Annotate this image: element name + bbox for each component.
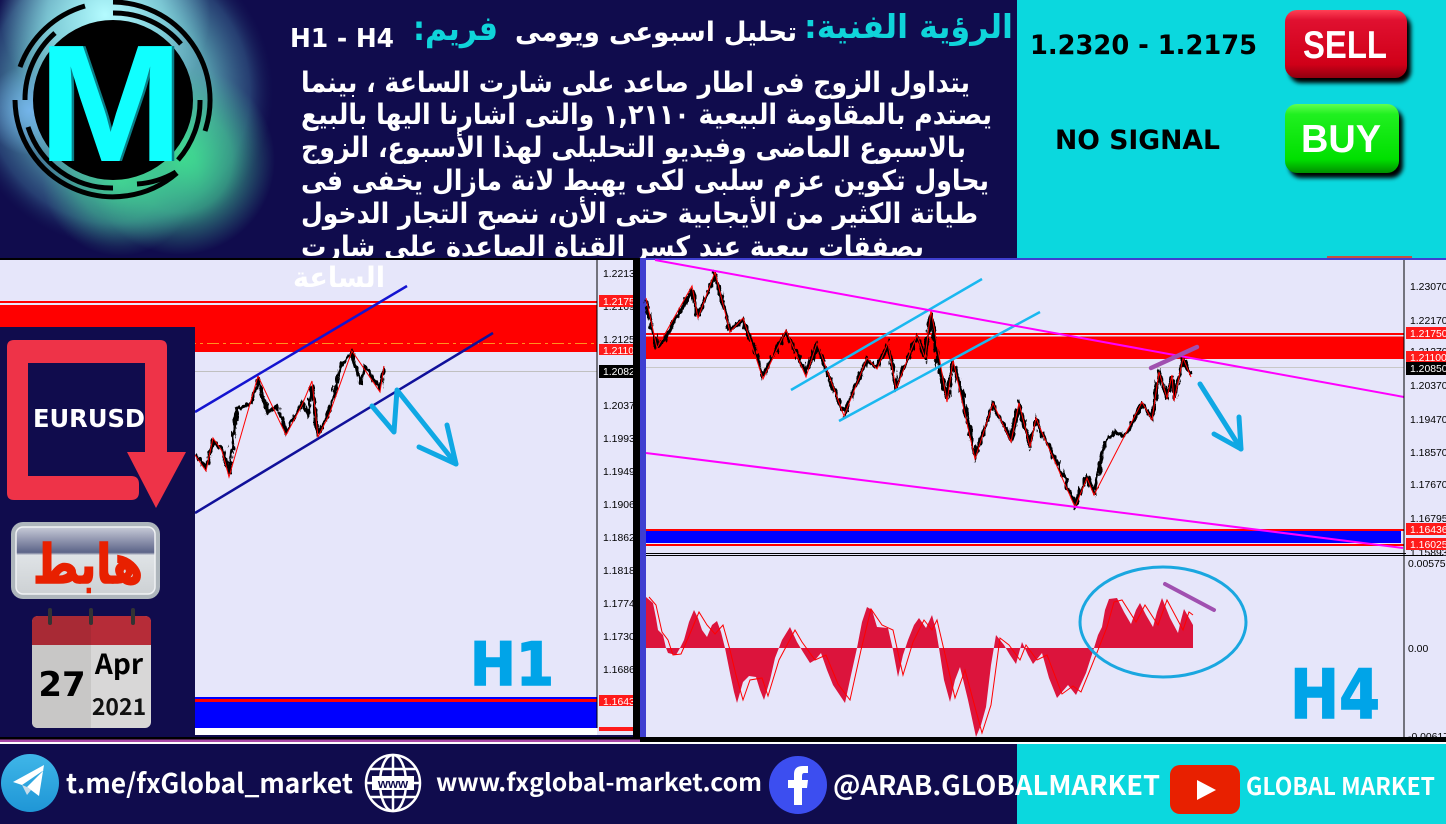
axis: H1 prices: 1.16436 <box>603 697 641 708</box>
arrow: H4 forecast <box>1200 384 1241 449</box>
channel cyan upper <box>791 279 982 390</box>
icon: youtube <box>1170 765 1240 814</box>
button: falling label: هابط <box>33 533 143 596</box>
chart: H4 price chart <box>640 258 1446 743</box>
icon: date calendar: Apr <box>94 643 144 683</box>
axis: H1 prices: 1.17740 <box>603 599 641 610</box>
logo: M emblem <box>0 0 275 256</box>
channel lower H1 <box>195 333 493 513</box>
text: facebook handle: @ARAB.GLOBALMARKET <box>833 764 1160 803</box>
icon: date calendar: 2021 <box>92 688 146 722</box>
icon: telegram <box>1 754 59 812</box>
axis: H1 prices: 1.21100 <box>603 346 640 357</box>
chart: H1 price chart <box>0 258 641 738</box>
purple rising mark <box>1151 347 1197 368</box>
button: falling label <box>11 522 160 599</box>
icon: web globe <box>366 755 420 811</box>
text block: analysis paragraph <box>301 66 992 263</box>
purple falling mark <box>1165 584 1214 610</box>
text: no signal: NO SIGNAL <box>1055 125 1220 156</box>
axis: H1 prices: 1.22130 <box>603 269 641 280</box>
icon: date calendar: 27 <box>38 665 86 705</box>
axis: H4 prices <box>1404 260 1446 743</box>
chart frame strips <box>0 256 1412 742</box>
channel upper H1 <box>195 286 407 412</box>
button: sell: SELL <box>1303 24 1387 67</box>
axis: H1 prices: 1.18620 <box>603 533 641 544</box>
callout ellipse <box>1080 567 1246 677</box>
axis: H1 prices <box>596 260 633 731</box>
axis: H1 prices: 1.18180 <box>603 566 641 577</box>
zigzag H1 <box>195 351 384 477</box>
button: sell <box>1285 10 1411 83</box>
icon: EURUSD down arrow: EURUSD <box>33 404 145 433</box>
icon: facebook <box>769 756 827 814</box>
icon: date calendar <box>32 608 151 728</box>
button: buy: BUY <box>1301 118 1381 161</box>
footer strip <box>0 737 1446 824</box>
text: sell range: 1.2320 - 1.2175 <box>1030 30 1257 61</box>
oscillator histogram <box>646 597 1193 737</box>
text: paragraph last word over chart: الساعة <box>293 261 385 294</box>
price line H1 <box>195 353 384 474</box>
axis: H1 prices: 1.16860 <box>603 665 641 676</box>
text block: analysis paragraph: يصتدم بالمقاومة البيعية ١,٢١١٠ والتى اشارنا اليها بالبيع <box>301 98 992 131</box>
heading: frame: فريم: <box>413 9 498 49</box>
logo: M emblem: M <box>38 11 184 197</box>
axis: H1 prices: 1.19490 <box>603 467 641 478</box>
axis: H4 prices: 1.21100 <box>1410 353 1446 364</box>
axis: H1 prices: 1.17300 <box>603 632 641 643</box>
button: buy <box>1285 104 1403 178</box>
trendline magenta lower <box>646 453 1403 548</box>
icon: EURUSD down arrow <box>7 340 186 508</box>
text block: analysis paragraph: بصفقات بيعية عند كسر القناة الصاعدة على شارت <box>301 230 924 263</box>
logo: M emblem: M <box>40 11 186 197</box>
text block: analysis paragraph: طياتة الكثير من الأيجابية حتى الأن، ننصح التجار الدخول <box>301 196 978 230</box>
axis: H1 prices: 1.21250 <box>603 335 641 346</box>
trendline magenta upper <box>655 260 1404 397</box>
panel: signal panel background <box>1017 0 1446 258</box>
zigzag H4 <box>646 272 1191 507</box>
axis: H1 prices: 1.19930 <box>603 434 641 445</box>
text block: analysis paragraph: بالاسبوع الماضى وفيديو التحليلى لهذا الأسبوع، الزوج <box>301 130 966 165</box>
oscillator signal line <box>649 597 1193 733</box>
axis: H1 prices: 1.21690 <box>603 302 641 313</box>
axis: H1 prices: 1.21750 <box>603 297 641 308</box>
axis: H4 prices: 0.00 <box>1408 644 1428 655</box>
axis: H1 prices: 1.19060 <box>603 500 641 511</box>
label: H1: H1 <box>470 630 554 700</box>
axis: H1 prices: 1.20370 <box>603 401 641 412</box>
text block: analysis paragraph: يتداول الزوج فى اطار صاعد على شارت الساعة ، بينما <box>301 66 970 100</box>
text: youtube channel: GLOBAL MARKET <box>1246 767 1435 802</box>
text: analysis type: تحليل اسبوعى ويومى <box>515 17 797 48</box>
text block: analysis paragraph: يحاول تكوين عزم سلبى لكى يهبط لانة مازال يخفى فى <box>301 164 989 197</box>
arrow: H1 forecast <box>372 390 456 464</box>
price line H4 <box>646 275 1191 504</box>
panel: left sidebar <box>0 327 195 741</box>
channel cyan lower <box>839 312 1040 421</box>
heading: technical view: الرؤية الفنية: <box>804 7 1013 47</box>
label: H4: H4 <box>1290 656 1380 735</box>
icon: web globe: www <box>377 776 409 791</box>
text: timeframes: H1 - H4 <box>290 24 394 54</box>
text: website: www.fxglobal-market.com <box>436 763 762 798</box>
text: telegram link: t.me/fxGlobal_market <box>66 762 353 801</box>
axis: H1 prices: 1.20825 <box>603 367 641 378</box>
